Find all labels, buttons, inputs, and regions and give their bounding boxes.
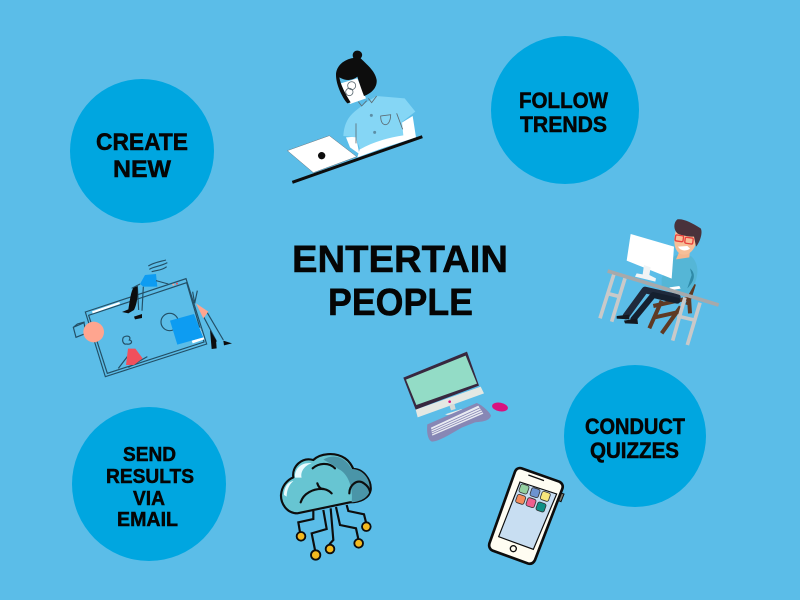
panel: send results via email: VIA bbox=[133, 487, 165, 510]
icon: desktop computer with keyboard and mouse bbox=[403, 352, 509, 442]
panel: send results via email bbox=[72, 407, 226, 561]
panel: follow trends: TRENDS bbox=[520, 112, 607, 137]
panel: follow trends bbox=[491, 36, 639, 184]
icon: man at desktop computer bbox=[600, 219, 719, 345]
title: ENTERTAIN bbox=[292, 239, 508, 281]
title bbox=[292, 239, 508, 324]
panel: create new: NEW bbox=[113, 156, 171, 183]
panel: create new bbox=[70, 79, 214, 223]
panel: send results via email: RESULTS bbox=[106, 465, 194, 488]
icon: smartphone bbox=[489, 468, 564, 564]
title: PEOPLE bbox=[328, 282, 473, 324]
panel: conduct quizzes: QUIZZES bbox=[590, 438, 679, 463]
icon: woman working on laptop bbox=[287, 51, 422, 182]
panel: send results via email: SEND bbox=[123, 443, 176, 466]
panel: send results via email: EMAIL bbox=[117, 508, 178, 531]
icon: cloud with circuit nodes bbox=[281, 454, 371, 560]
icon: people around browser window bbox=[73, 260, 232, 377]
panel: follow trends: FOLLOW bbox=[519, 88, 608, 113]
panel: conduct quizzes bbox=[564, 365, 706, 507]
panel: conduct quizzes: CONDUCT bbox=[585, 414, 686, 439]
panel: create new: CREATE bbox=[96, 129, 188, 156]
